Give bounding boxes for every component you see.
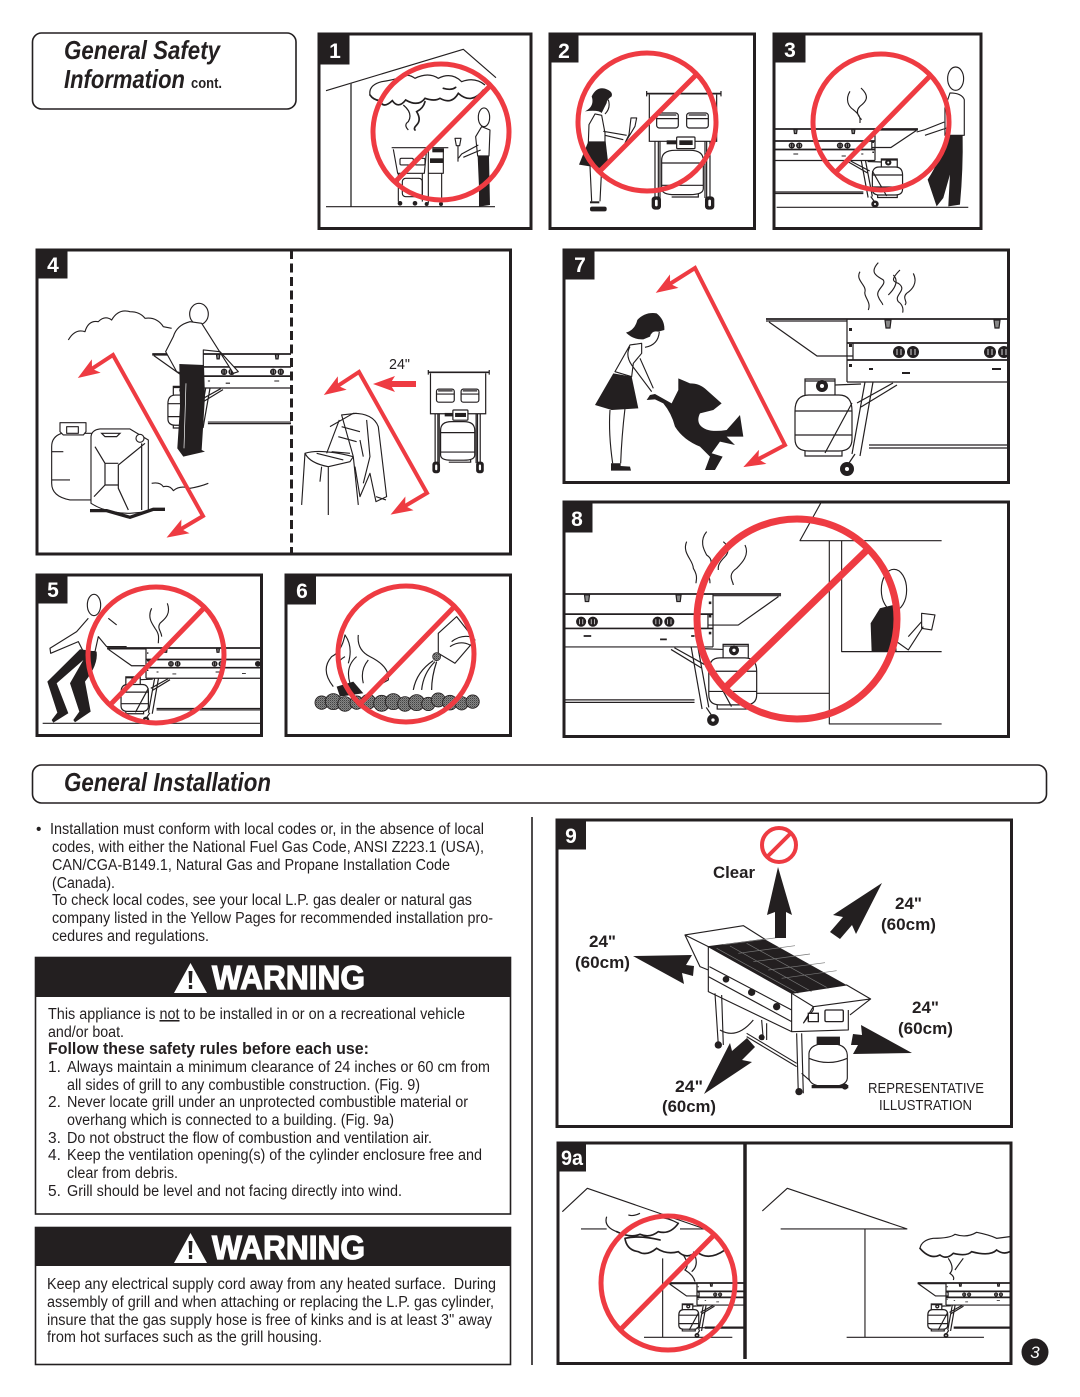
number tab 5 [38,576,68,604]
numbered safety rules: Keep the ventilation opening(s) of the cylinder enclosure free and [67,1147,482,1164]
warning 2 text [47,1276,496,1346]
clearance labels: (60cm) [662,1097,716,1116]
text block: installation codes: codes, with either the National Fuel Gas Code, ANSI Z223.1 (USA), [52,839,484,856]
24 inch dimension arrow [384,381,416,387]
clearance labels: 24" [589,932,616,951]
prohibition symbol [578,53,716,191]
numbered safety rules: 1. [48,1059,61,1076]
number tab 9: 9 [565,825,577,848]
clearance labels [575,863,953,1116]
number tab 8: 8 [571,508,583,531]
divider between views [743,1142,747,1359]
illustration: grill beside building with person at window [566,504,942,726]
numbered safety rules: 3. [48,1130,61,1147]
number tab 1 [320,36,350,64]
clearance labels: 24" [675,1077,703,1096]
illustration: chair and jacket near grill [302,370,489,515]
arrow: left [633,955,694,984]
number tab 9a: 9a [561,1147,583,1170]
arrow: rear right [830,883,882,939]
safety rules heading: Follow these safety rules before each use: [48,1039,369,1058]
numbered safety rules: Do not obstruct the flow of combustion and ventilation air. [67,1130,432,1147]
note: representative illustration: REPRESENTATIVE [868,1080,984,1097]
illustration: girl and dog [595,313,743,471]
text block: installation codes: CAN/CGA-B149.1, Natural Gas and Propane Installation Code [52,857,450,874]
number tab 4 [38,252,68,278]
illustration: flames, coals and fuel bottle [315,617,479,711]
note: representative illustration [868,1080,984,1114]
warning 1 intro text [48,1006,465,1041]
warning 1 intro text: This appliance is not to be installed in or on a recreational vehicle [48,1006,465,1023]
illustration: person at grill under roof [326,49,496,207]
text block: installation codes: (Canada). [52,875,115,892]
small prohibition symbol [762,828,796,862]
number tab 7 [566,252,594,280]
prohibition symbol [338,586,474,722]
illustration: grill in perspective [685,926,871,1095]
text block: installation codes: company listed in the Yellow Pages for recommended installation pro- [52,910,493,927]
title: General Safety Information: cont. [191,76,222,92]
numbered safety rules: Grill should be level and not facing directly into wind. [67,1183,402,1200]
illustration: man near grill [42,594,260,724]
numbered safety rules: 5. [48,1183,61,1200]
text block: installation codes [36,821,493,945]
warning 1 intro text: and/or boat. [48,1024,124,1041]
clearance labels: 24" [912,998,939,1017]
arrow: clear above [767,867,792,938]
clearance labels: 24" [895,894,922,913]
text block: installation codes: • [36,821,41,838]
illustration: grill with tank and smoke [766,262,1007,476]
arrow: front [704,1038,755,1094]
warning box 2 [35,1227,511,1364]
numbered safety rules [48,1059,490,1200]
panel 2: children away from grill [550,34,754,228]
panel 3: do not move a lit grill [772,32,982,230]
panel 9a: overhang comparison [558,1142,1051,1364]
title: General Safety Information: Information [64,64,185,94]
clearance labels: (60cm) [881,915,936,934]
title: General Safety Information [32,33,296,109]
dashed divider [290,250,293,554]
numbered safety rules: clear from debris. [67,1165,178,1182]
numbered safety rules: Never locate grill under an unprotected combustible material or [67,1094,468,1111]
panel 9: clearances [557,820,1012,1126]
text block: installation codes: To check local codes, see your local L.P. gas dealer or natural gas [52,892,472,909]
number tab 5: 5 [47,579,59,602]
number tab 8 [566,504,592,532]
number tab 6 [288,576,316,604]
number tab 4: 4 [47,254,59,277]
prohibition symbol [697,519,897,719]
warning header: WARNING [212,1229,365,1266]
red clearance arrow, right [333,372,427,509]
illustration: grill clear of overhang (correct) [762,1188,1010,1338]
clearance labels: (60cm) [575,953,630,972]
page number [1022,1338,1048,1366]
numbered safety rules: Always maintain a minimum clearance of 24 inches or 60 cm from [67,1059,490,1076]
heading: General Installation [32,765,1046,803]
numbered safety rules: overhang which is connected to a building. (Fig. 9a) [67,1112,394,1129]
numbered safety rules: 2. [48,1094,61,1111]
text block: installation codes: cedures and regulations. [52,928,209,945]
illustration: girl with spatula beside grill [579,88,721,211]
number tab 3: 3 [784,39,796,62]
illustration: man moving grill [776,66,968,208]
clearance labels: (60cm) [898,1019,953,1038]
number tab 3 [776,36,806,62]
number tab 6: 6 [296,580,308,603]
warning box 1 [35,957,511,1214]
warning 2 text: from hot surfaces such as the grill housing. [47,1329,322,1346]
warning 2 text: assembly of grill and when attaching or replacing the L.P. gas cylinder, [47,1294,494,1311]
illustration: grill under overhang (prohibited) [562,1188,744,1338]
warning icon [174,1233,207,1263]
page number: 3 [1030,1343,1040,1362]
numbered safety rules: 4. [48,1147,61,1164]
illustration: man at grill with fuel containers [51,302,291,519]
warning 2 text: Keep any electrical supply cord away from any heated surface. During [47,1276,496,1293]
prohibition symbol [88,587,224,723]
number tab 9 [558,821,586,850]
numbered safety rules: all sides of grill to any combustible construction. (Fig. 9) [67,1077,420,1094]
number tab 2 [552,36,578,63]
prohibition symbol [601,1216,735,1350]
arrow: right [851,1025,912,1054]
note: representative illustration: ILLUSTRATION [879,1097,972,1114]
panel 5: do not lean over grill [37,575,290,736]
red clearance arrow [665,268,785,462]
label: 24 inches: 24" [389,357,410,373]
panel 4: keep combustibles and fuel clear [37,250,510,554]
clearance labels: Clear [713,863,755,882]
warning header: WARNING [212,959,365,996]
warning 2 text: insure that the gas supply hose is free of kinks and is at least 3" away [47,1312,492,1329]
text block: installation codes: Installation must conform with local codes or, in the absence of local [50,821,484,838]
prohibition symbol [373,64,509,200]
number tab 7: 7 [574,254,586,277]
red clearance arrow, left [87,355,203,532]
panel 6: do not use lighter fluid [286,575,510,736]
title: General Safety Information: General Safety [64,35,221,65]
number tab 2: 2 [558,40,570,63]
panel 8: do not use grill under overhang or next to window [562,500,1010,738]
panel 7: keep children and pets away [562,248,1010,484]
number tab 1: 1 [329,40,341,63]
panel 1: no grilling under overhead roof [319,34,531,228]
warning icon [174,963,207,993]
heading: General Installation: General Installation [64,767,271,797]
prohibition symbol [813,54,949,190]
